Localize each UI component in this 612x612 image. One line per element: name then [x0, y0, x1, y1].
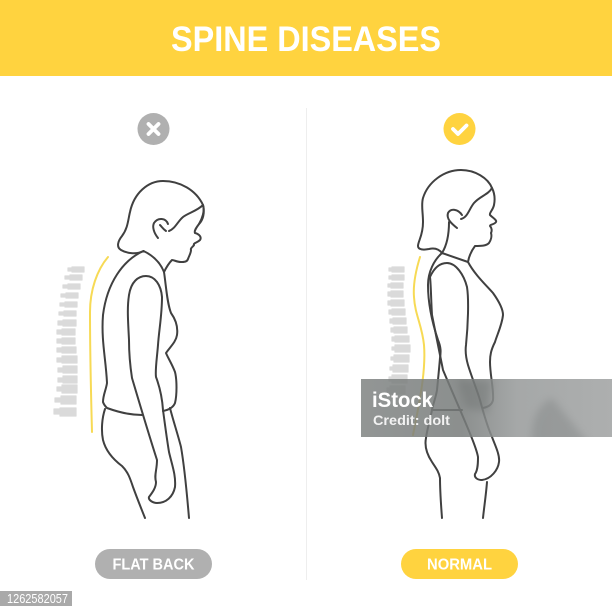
watermark text: credit: Credit: dolt — [373, 413, 451, 428]
yellow spine curve: normal — [413, 257, 424, 435]
watermark band — [361, 379, 612, 437]
torso: flat back — [103, 251, 177, 415]
watermark text: iStock: iStock — [372, 389, 433, 412]
header banner — [0, 0, 612, 76]
arm: flat back — [128, 276, 175, 503]
head and hair: normal — [418, 170, 496, 262]
label pill: flat back — [95, 549, 212, 579]
image id tag: 1262582057 — [7, 592, 68, 606]
icon: check badge — [444, 113, 476, 145]
panel: flat back figure — [54, 181, 204, 518]
yellow spine curve: flat back — [90, 257, 108, 432]
hair fringe and ear: normal — [442, 188, 492, 253]
legs: flat back — [102, 408, 189, 518]
hair fringe and ear: flat back — [153, 205, 204, 238]
icon: cross badge — [138, 113, 170, 145]
label pill: normal: NORMAL — [427, 556, 492, 574]
legs: normal — [425, 410, 487, 518]
label pill: normal — [401, 549, 518, 579]
title: SPINE DISEASES — [171, 20, 441, 59]
spine: flat back — [54, 267, 84, 416]
panel: normal figure — [387, 170, 503, 518]
arm: normal — [430, 263, 499, 480]
label pill: flat back: FLAT BACK — [112, 556, 195, 574]
torso: normal — [428, 253, 503, 410]
spine: normal — [387, 267, 410, 394]
head and hair: flat back — [118, 181, 204, 272]
